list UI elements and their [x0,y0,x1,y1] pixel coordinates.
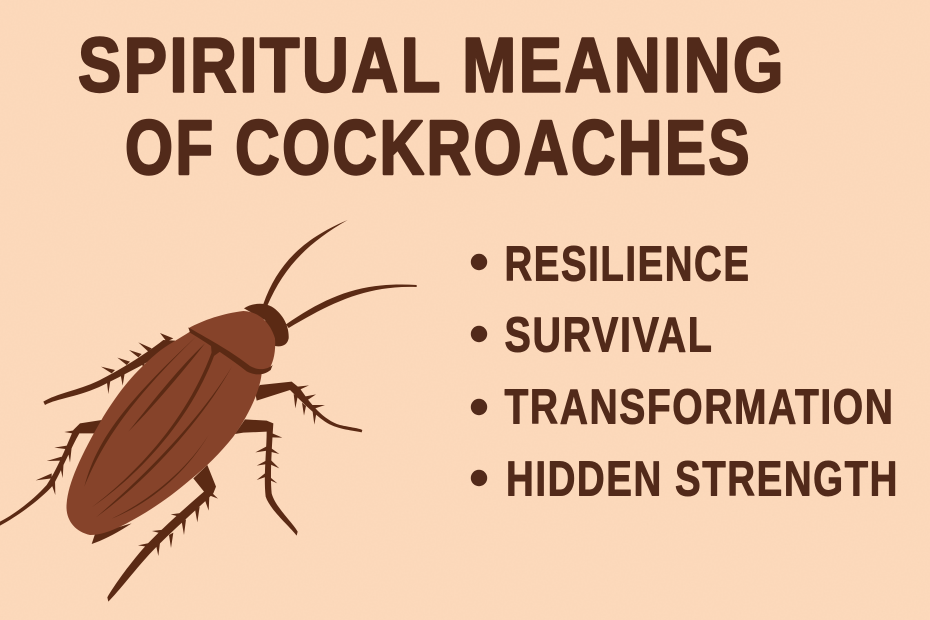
legs with spines [0,333,362,602]
pronotum edge band [188,327,273,374]
wing veins [84,336,232,519]
item: survival: SURVIVAL [504,308,714,362]
pronotum [188,311,275,372]
wings [66,332,262,535]
title [78,22,786,191]
title: SPIRITUAL MEANING [78,22,786,108]
head [244,304,289,346]
item: resilience: RESILIENCE [504,236,750,292]
abdomen tip [92,523,132,544]
antennae [263,220,417,328]
title: OF COCKROACHES [125,105,752,191]
list: spiritual meanings [471,236,899,506]
illustration: cockroach [0,220,417,602]
